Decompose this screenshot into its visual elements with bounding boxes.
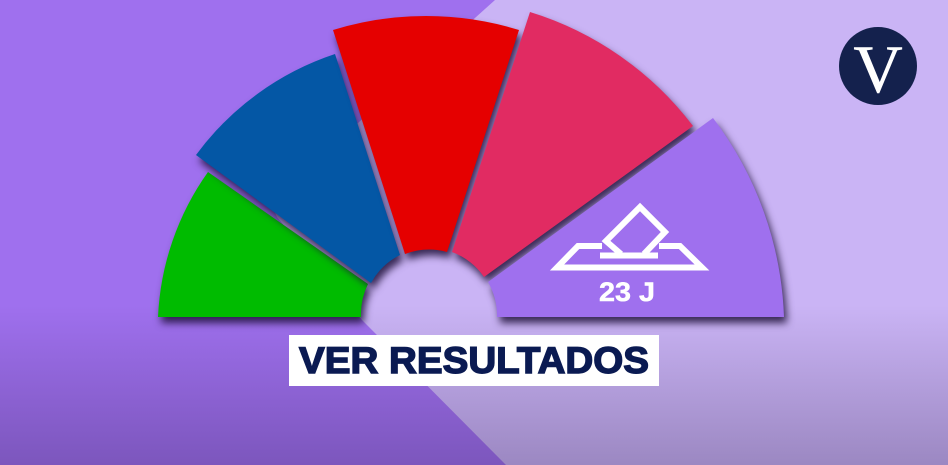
segment: purple — [488, 118, 784, 317]
logo circle — [839, 27, 917, 105]
button text: VER RESULTADOS — [299, 340, 649, 381]
hemicycle chart — [158, 12, 784, 317]
icon: ballot box — [557, 207, 702, 268]
icon: ballot paper — [606, 207, 665, 254]
segment: blue — [196, 54, 400, 283]
icon: box slot — [600, 252, 658, 258]
button background — [289, 335, 659, 386]
icon: box outline — [557, 246, 702, 268]
segment: green — [158, 172, 368, 317]
date label: 23 J — [599, 277, 655, 307]
call to action — [289, 335, 659, 386]
background: bottom shadow gradient — [0, 305, 948, 465]
segment: pink — [452, 12, 693, 277]
logo letter: V — [853, 31, 903, 107]
background: light lilac diagonal panel — [270, 0, 948, 465]
segment: red — [333, 16, 519, 254]
logo — [839, 27, 917, 107]
